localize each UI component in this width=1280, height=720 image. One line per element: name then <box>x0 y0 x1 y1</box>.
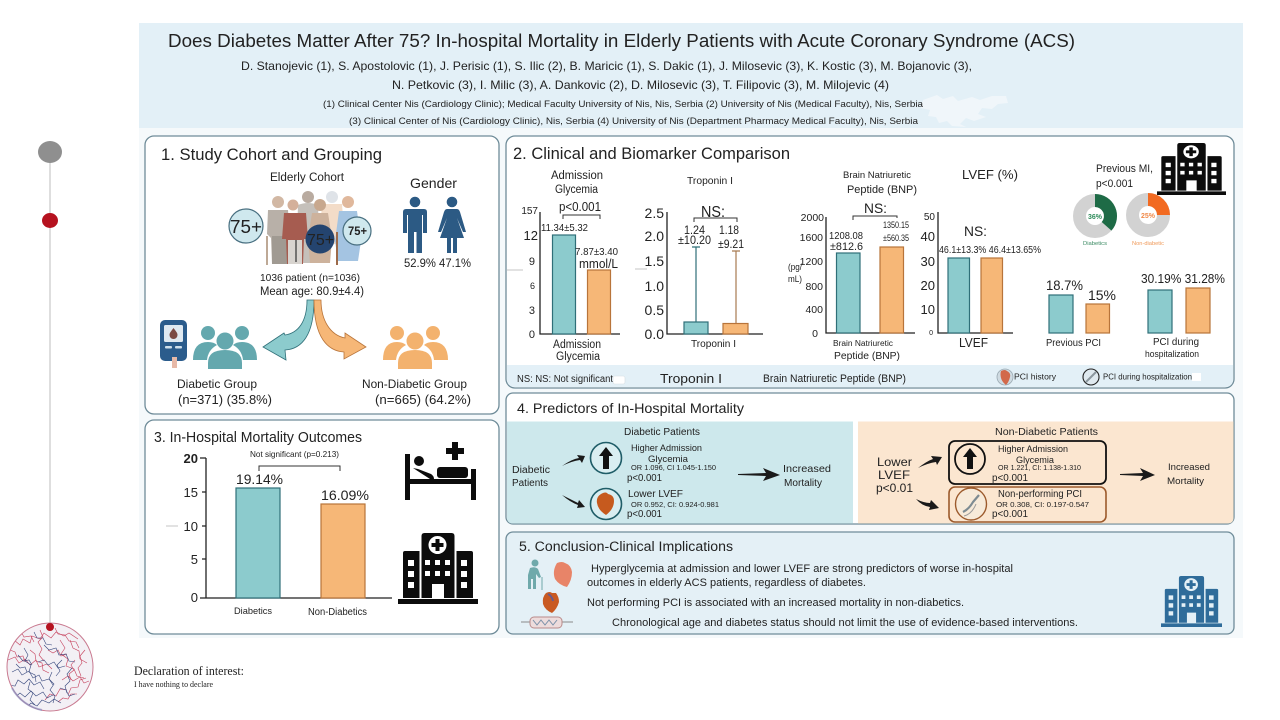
arrow: to LVEF <box>562 495 585 508</box>
sub-panel: non-diabetic patients: Lower <box>877 455 912 469</box>
sub-panel: non-diabetic patients: Non-Diabetic Patients <box>995 427 1098 438</box>
chart: admission glycemia: 0 <box>529 329 535 341</box>
chart: previous PCI <box>1046 277 1116 349</box>
donut: non-diabetic 25% <box>1132 200 1165 247</box>
chart: troponin I: 2.0 <box>645 228 664 244</box>
heading 2: 2. Clinical and Biomarker Comparison <box>513 144 790 163</box>
gender percentages: 52.9% 47.1% <box>404 258 471 270</box>
sub-panel: diabetic patients: Patients <box>512 478 548 489</box>
chart: LVEF: 50 <box>924 212 935 223</box>
bar chart: mortality: 20 <box>184 451 198 466</box>
previous MI label <box>1096 163 1153 190</box>
bar chart: mortality: Not significant (p=0.213) <box>250 449 339 459</box>
heading 1: 1. Study Cohort and Grouping <box>161 145 382 164</box>
chart: admission glycemia: mmol/L <box>579 257 618 271</box>
arrow: to PCI box <box>916 499 939 510</box>
chart: brain natriuretic peptide: Peptide (BNP) <box>847 184 917 196</box>
icon: 75+ badge dark: 75+ <box>307 232 334 249</box>
chart: brain natriuretic peptide: 1208.08 <box>829 230 863 242</box>
icon: heart circle <box>590 488 622 520</box>
sub-panel: diabetic patients: Diabetic Patients <box>624 427 700 438</box>
chart: brain natriuretic peptide: (pg/ <box>788 262 802 273</box>
arrow: to glycemia box <box>918 456 942 468</box>
chart: brain natriuretic peptide: 1350.15 <box>883 220 909 231</box>
donut: diabetics 36%: Diabetics <box>1083 241 1108 247</box>
cohort size: 1036 patient (n=1036) <box>260 272 360 284</box>
sub-panel: diabetic patients: OR 1.096, CI 1.045-1.150 <box>631 465 716 472</box>
chart: troponin I: 2.5 <box>645 205 664 221</box>
chart: troponin I: 1.5 <box>645 253 664 269</box>
icon: heart red <box>543 592 559 613</box>
chart: LVEF: LVEF (%) <box>962 167 1018 182</box>
diabetic group label <box>177 377 272 407</box>
sub-panel: non-diabetic patients: Mortality <box>1167 476 1204 487</box>
mean age: Mean age: 80.9±4.4) <box>260 286 364 298</box>
decorative faded map <box>921 95 1008 127</box>
chart: PCI during hospitalization: 30.19% 31.28% <box>1141 271 1225 286</box>
affiliations line 1: (1) Clinical Center Nis (Cardiology Clinic); Medical Faculty University of Nis, Nis, Serbia (2) University of Nis (Medical Faculty), Nis, Serbia <box>323 99 924 110</box>
gender heading: Gender <box>410 175 457 191</box>
icon: diabetic group people <box>193 326 257 369</box>
title: Does Diabetes Matter After 75? In-hospital Mortality in Elderly Patients with Acute Coronary Syndrome (ACS) <box>168 30 1075 51</box>
chart: troponin I: ±10.20 <box>678 235 711 247</box>
icon: 75+ badge right: 75+ <box>348 226 367 238</box>
chart: LVEF: 0 <box>929 330 933 337</box>
panel: 3 in-hospital mortality outcomes <box>145 420 499 634</box>
bar chart: mortality: Non-Diabetics <box>308 607 367 618</box>
donut: diabetics 36%: 36% <box>1088 212 1102 221</box>
chart: troponin I: 1.0 <box>645 278 664 294</box>
icon: stent <box>521 617 573 628</box>
chart: admission glycemia: 11.34±5.32 <box>541 222 588 234</box>
icon: 75+ badge left: 75+ <box>230 217 262 237</box>
sub-panel: diabetic patients: Glycemia <box>648 454 689 465</box>
box: higher glycemia <box>949 441 1106 484</box>
chart: LVEF: NS: <box>964 223 987 239</box>
icon: 75+ badge right <box>343 217 371 245</box>
affiliations line 2: (3) Clinical Center of Nis (Cardiology Clinic), Nis, Serbia (4) University of Nis (Department Pharmacy Medical Faculty), Nis, Serbia <box>349 116 919 127</box>
chart: brain natriuretic peptide: 400 <box>805 304 823 316</box>
panel: 5 conclusion <box>506 532 1234 634</box>
box: higher glycemia: Higher Admission <box>998 444 1068 455</box>
chart: troponin I: ±9.21 <box>718 239 744 251</box>
box: non-performing PCI: Non-performing PCI <box>998 489 1082 500</box>
bar chart: mortality: 15 <box>184 485 198 500</box>
panel: 1 study cohort and grouping <box>145 136 499 414</box>
chart: admission glycemia: Glycemia <box>555 184 599 196</box>
chart: admission glycemia: 3 <box>529 305 535 317</box>
icon: 75+ badge left <box>229 209 263 243</box>
sub-panel: non-diabetic patients <box>858 422 1234 524</box>
chart: admission glycemia: Glycemia <box>556 351 601 363</box>
timeline grey node <box>38 141 62 163</box>
icon: male <box>403 197 427 253</box>
non-diabetic group label: (n=665) (64.2%) <box>375 392 471 407</box>
chart: troponin I: 1.18 <box>719 225 739 237</box>
icon: hospital black <box>1157 143 1226 195</box>
chart: brain natriuretic peptide: 2000 <box>801 212 824 224</box>
authors line 2: N. Petkovic (3), I. Milic (3), A. Dankovic (2), D. Milosevic (3), T. Filipovic (3), M. Milojevic (4) <box>392 78 889 92</box>
bar chart: mortality: 10 <box>184 519 198 534</box>
donut: non-diabetic 25%: 25% <box>1141 211 1155 220</box>
bar chart: mortality: 0 <box>191 590 198 605</box>
chart: previous PCI: 15% <box>1088 287 1116 303</box>
chart: brain natriuretic peptide: ±560.35 <box>883 233 909 244</box>
conclusion text: outcomes in elderly ACS patients, regardless of diabetes. <box>587 577 866 589</box>
icon: non-diabetic group people <box>383 326 448 369</box>
chart: troponin I <box>635 176 763 350</box>
sub-panel: non-diabetic patients: LVEF <box>878 468 910 482</box>
declaration of interest: Declaration of interest: <box>134 664 244 678</box>
chart: LVEF: 10 <box>921 302 935 317</box>
chart: previous PCI: Previous PCI <box>1046 337 1101 349</box>
arrow: to increased mortality <box>738 468 780 481</box>
diabetic group label: (n=371) (35.8%) <box>178 392 272 407</box>
bar chart: mortality: 16.09% <box>321 487 369 503</box>
donut: non-diabetic 25%: Non-diabetic <box>1132 241 1165 247</box>
chart: brain natriuretic peptide: 1200 <box>800 256 823 268</box>
globe of vessels <box>7 623 93 711</box>
legend: troponin I: Troponin I <box>660 371 722 386</box>
chart: PCI during hospitalization: hospitalization <box>1145 349 1199 359</box>
icon: hospital bed <box>405 442 476 500</box>
bar chart: mortality: 5 <box>191 552 198 567</box>
previous MI label: Previous MI, <box>1096 163 1153 175</box>
legend: PCI during hospitalization: PCI during hospitalization <box>1103 372 1192 382</box>
timeline red node <box>42 213 58 228</box>
declaration of interest <box>134 664 244 689</box>
chart: brain natriuretic peptide: Peptide (BNP) <box>834 350 900 362</box>
chart: LVEF: 46.1±13.3% 46.4±13.65% <box>939 245 1041 256</box>
sub-panel: non-diabetic patients: Increased <box>1168 462 1210 473</box>
conclusion text: Hyperglycemia at admission and lower LVEF are strong predictors of worse in-hospital <box>591 563 1013 575</box>
chart: LVEF: 20 <box>921 278 935 293</box>
arrow: to glycemia <box>562 455 585 466</box>
chart: brain natriuretic peptide: Brain Natriuretic <box>843 170 911 181</box>
heading 5: 5. Conclusion-Clinical Implications <box>519 539 733 554</box>
heading 3: 3. In-Hospital Mortality Outcomes <box>154 430 362 446</box>
panel: 2 clinical and biomarker comparison <box>506 136 1234 388</box>
arrow: to diabetic group <box>263 300 314 360</box>
chart: brain natriuretic peptide: Brain Natriuretic <box>833 339 893 348</box>
bar chart: mortality <box>166 449 392 618</box>
conclusion text: Chronological age and diabetes status should not limit the use of evidence-based interventions. <box>612 617 1078 629</box>
authors line 1: D. Stanojevic (1), S. Apostolovic (1), J. Perisic (1), S. Ilic (2), B. Maricic (1), S. Dakic (1), J. Milosevic (3), K. Kostic (3), M. Bojanovic (3), <box>241 59 972 73</box>
globe top red dot <box>46 623 54 631</box>
previous MI label: p<0.001 <box>1096 178 1133 190</box>
chart: LVEF: 30 <box>921 254 935 269</box>
box: higher glycemia: OR 1.221, CI: 1.138-1.310 <box>998 465 1081 472</box>
chart: brain natriuretic peptide <box>788 170 917 362</box>
chart: troponin I: Troponin I <box>687 176 733 187</box>
chart: previous PCI: 18.7% <box>1046 277 1083 293</box>
chart: admission glycemia <box>507 170 620 363</box>
icon: heart salmon <box>554 562 572 587</box>
box: higher glycemia: Glycemia <box>1016 455 1055 466</box>
legend: PCI during hospitalization <box>1083 369 1201 385</box>
legend: not significant: NS: NS: Not significant <box>517 374 613 385</box>
bar chart: mortality: Diabetics <box>234 606 272 617</box>
chart: brain natriuretic peptide: 800 <box>805 281 823 293</box>
icon: hospital building <box>398 533 478 604</box>
sub-panel: diabetic patients: Mortality <box>784 478 822 489</box>
chart: admission glycemia: 6 <box>530 281 535 291</box>
sub-panel: diabetic patients: OR 0.952, CI: 0.924-0.981 <box>631 502 719 509</box>
box: non-performing PCI <box>949 487 1106 522</box>
legend: PCI history: PCI history <box>1014 372 1056 382</box>
conclusion text <box>587 563 1078 629</box>
arrow: to non-diabetic group <box>314 300 366 359</box>
sub-panel: diabetic patients: Increased <box>783 463 831 475</box>
sub-panel: diabetic patients <box>507 422 853 524</box>
icon: glucometer <box>160 320 187 368</box>
header banner <box>139 23 1243 128</box>
donut: diabetics 36% <box>1080 200 1111 247</box>
chart: LVEF: 40 <box>921 229 935 244</box>
elderly cohort label: Elderly Cohort <box>270 172 345 184</box>
icon: elderly person <box>528 560 542 590</box>
box: non-performing PCI: p<0.001 <box>992 509 1028 520</box>
box: higher glycemia: p<0.001 <box>992 473 1028 484</box>
chart: brain natriuretic peptide: mL) <box>788 274 802 285</box>
sub-panel: diabetic patients: p<0.001 <box>627 509 662 520</box>
chart: brain natriuretic peptide: 1600 <box>800 232 823 244</box>
heading 4: 4. Predictors of In-Hospital Mortality <box>517 400 744 416</box>
sub-panel: diabetic patients: p<0.001 <box>627 473 662 484</box>
chart: admission glycemia: p<0.001 <box>559 200 601 214</box>
legend: BNP: Brain Natriuretic Peptide (BNP) <box>763 373 906 385</box>
chart: admission glycemia: 157 <box>521 206 538 217</box>
chart: brain natriuretic peptide: ±812.6 <box>830 241 863 253</box>
chart: LVEF <box>921 167 1041 350</box>
sub-panel: diabetic patients: Diabetic <box>512 465 550 476</box>
chart: admission glycemia: 7.87±3.40 <box>575 246 618 258</box>
legend strip <box>507 365 1233 387</box>
chart: admission glycemia: Admission <box>553 339 601 351</box>
icon: up arrow circle <box>590 442 622 474</box>
non-diabetic group label: Non-Diabetic Group <box>362 377 467 391</box>
chart: troponin I: 0.5 <box>645 302 664 318</box>
bar chart: mortality: 19.14% <box>236 471 283 487</box>
box: non-performing PCI: OR 0.308, CI: 0.197-0.547 <box>996 502 1089 509</box>
sub-panel: diabetic patients: Lower LVEF <box>628 489 683 500</box>
conclusion text: Not performing PCI is associated with an increased mortality in non-diabetics. <box>587 597 964 609</box>
panel: 4 predictors of in-hospital mortality <box>506 393 1234 524</box>
icon: elderly group <box>267 191 361 265</box>
arrow: to increased mortality <box>1120 468 1155 481</box>
chart: troponin I: 1.24 <box>684 225 706 237</box>
chart: PCI during hospitalization <box>1141 271 1225 359</box>
chart: LVEF: LVEF <box>959 335 988 350</box>
icon: hospital blue <box>1161 576 1222 627</box>
sub-panel: non-diabetic patients: p<0.01 <box>876 481 913 495</box>
sub-panel: diabetic patients: Higher Admission <box>631 443 702 454</box>
non-diabetic group label <box>362 377 471 407</box>
legend: PCI history <box>997 369 1056 385</box>
poster background <box>139 23 1243 638</box>
declaration of interest: I have nothing to declare <box>134 680 213 689</box>
icon: female <box>438 197 466 253</box>
chart: PCI during hospitalization: PCI during <box>1153 336 1199 348</box>
chart: brain natriuretic peptide: 0 <box>812 328 818 340</box>
chart: admission glycemia: 12 <box>524 228 538 243</box>
icon: 75+ badge dark <box>306 224 334 254</box>
chart: admission glycemia: 9 <box>529 256 535 268</box>
chart: troponin I: 0.0 <box>645 326 664 342</box>
chart: troponin I: Troponin I <box>691 338 736 350</box>
chart: troponin I: NS: <box>701 204 725 221</box>
diabetic group label: Diabetic Group <box>177 377 257 391</box>
chart: brain natriuretic peptide: NS: <box>864 200 887 216</box>
chart: admission glycemia: Admission <box>551 170 603 182</box>
timeline <box>38 141 62 627</box>
